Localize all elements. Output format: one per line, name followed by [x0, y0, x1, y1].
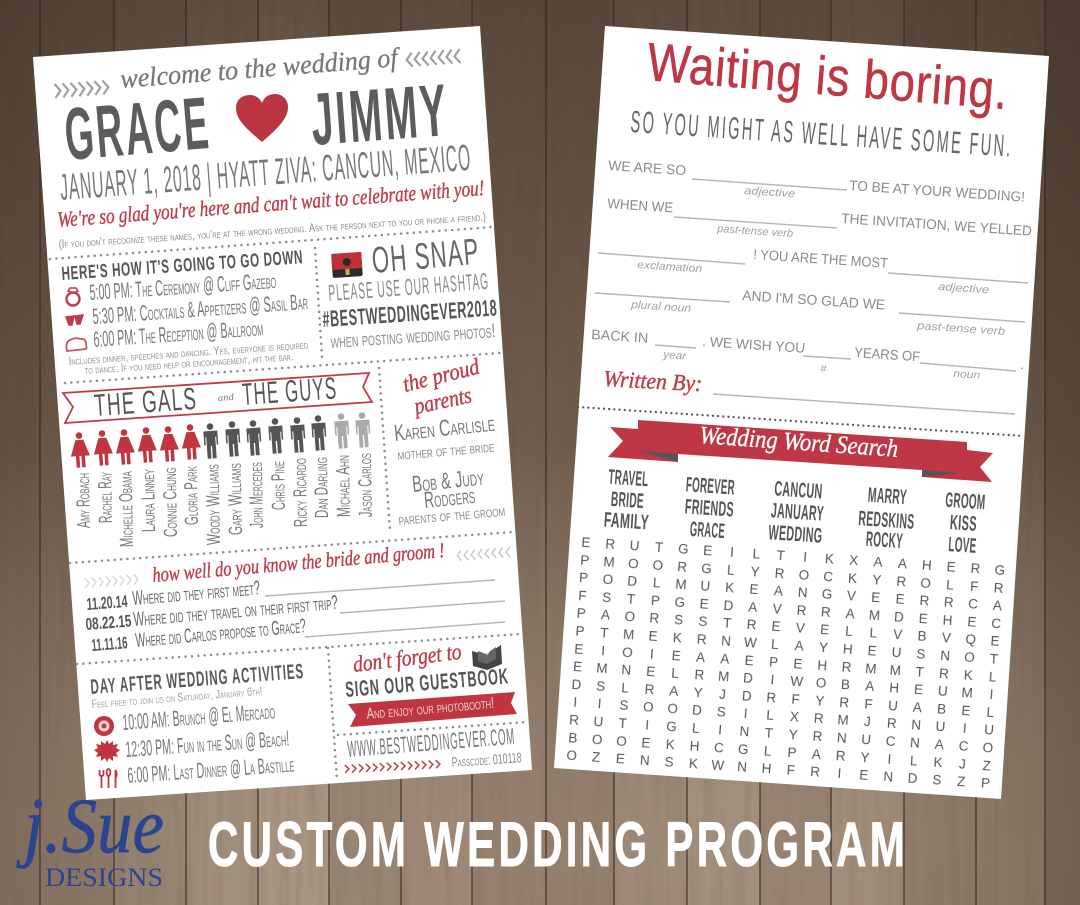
heading: how well: how well do you know the bride and groom ! — [151, 538, 445, 587]
text: photobooth: And enjoy our photobooth! — [366, 695, 495, 723]
panel: word list: FAMILY — [603, 509, 650, 534]
chart: word search grid — [566, 535, 1006, 791]
text: when posting: when posting wedding photos! — [330, 320, 496, 353]
text: party names: Gloria Park — [181, 466, 203, 525]
panel: day after activities: 6:00 PM: Last Dinner @ La Bastille — [127, 751, 295, 788]
text: party names: Laura Linney — [138, 469, 160, 532]
icon: sun — [94, 740, 120, 762]
chevrons: quiz right — [457, 547, 510, 561]
icon: glasses — [66, 315, 83, 325]
text: to be at your wedding: TO BE AT YOUR WEDDING! — [849, 177, 1025, 205]
panel: word list: WEDDING — [768, 521, 823, 548]
text: party names: Dan Darling — [311, 457, 333, 518]
panel: word list: JANUARY — [770, 499, 825, 526]
icon: cutlery — [100, 769, 117, 788]
heading: the gals: THE GALS — [93, 381, 198, 423]
text: when we: WHEN WE — [607, 195, 674, 215]
text: party names: Connie Chung — [160, 467, 182, 537]
heading: sign our guestbook: SIGN OUR GUESTBOOK — [344, 663, 510, 702]
hint: number: # — [820, 363, 828, 375]
chart: word search grid: BOOEKHCGLPARYILKJZ — [568, 730, 991, 773]
chart: word search grid: PTMEKRNWLAYHEUSNOT — [575, 624, 999, 667]
panel: day after activities — [90, 660, 305, 788]
text: second date: 08.22.15 — [85, 611, 132, 634]
icon: ring — [66, 288, 80, 306]
text: party names: Gary Williams — [225, 463, 247, 535]
heading: don't forget to: don't forget to — [352, 639, 463, 677]
text: you are the most: ! YOU ARE THE MOST — [753, 246, 889, 271]
banner: the gals and the guys — [63, 373, 372, 423]
text: the invitation: THE INVITATION, WE YELLED — [841, 210, 1032, 239]
banner: photobooth — [348, 692, 517, 727]
name: Grace: GRACE — [61, 81, 214, 176]
text: welcome message: We're so glad you're here and can't wait to celebrate with you! — [57, 175, 485, 232]
icon: instant camera — [331, 252, 363, 278]
text: full stop: . — [1020, 356, 1025, 372]
text: party names: Chris Pine — [268, 461, 290, 510]
panel: website — [345, 723, 522, 773]
chart: word search grid: EMNELRMDIWOBAHEUMI — [573, 659, 994, 702]
text: reception note: Includes dinner, speeches and dancing. Yes, everyone is required — [68, 337, 309, 368]
heading: the proud: the proud — [400, 354, 482, 397]
hint: adjective: adjective — [744, 185, 795, 200]
text: party names: Jason Carlos — [355, 453, 377, 517]
text: years of: YEARS OF — [854, 344, 921, 364]
panel: schedule: 5:00 PM: The Ceremony @ Cliff Gazebo — [89, 268, 277, 305]
panel: schedule: 6:00 PM: The Reception @ Ballroom — [93, 315, 264, 352]
text: hashtag: #BESTWEDDINGEVER2018 — [322, 294, 498, 332]
panel: word list: BRIDE — [610, 488, 645, 513]
text: written by: Written By: — [603, 366, 703, 396]
infographic: custom wedding program mockup: JANUARY 1, 2018 | HYATT ZIVA: CANCUN, MEXICO — [59, 137, 472, 208]
heading: schedule: HERE'S HOW IT'S GOING TO GO DOWN — [61, 247, 304, 285]
heading: parents: parents — [410, 382, 474, 419]
hint: past-tense verb: past-tense verb — [716, 223, 793, 240]
chart: word search grid: EIOIEAAEPEHRMMTRKL — [574, 641, 997, 685]
text: party names: Rachel Ray — [95, 472, 117, 523]
chart: word search grid: RUTIGLINTYRNUCNACO — [569, 712, 994, 756]
heading: waiting is boring: Waiting is boring. — [645, 32, 1011, 121]
text: mother name: Karen Carlisle — [393, 410, 496, 446]
panel: schedule — [61, 247, 309, 377]
heading: welcome: welcome to the wedding of — [119, 42, 402, 94]
panel: word list: FOREVER — [685, 473, 736, 500]
panel: quiz — [85, 538, 510, 655]
heading: oh snap: OH SNAP — [370, 231, 481, 281]
text: and i'm so glad we: AND I'M SO GLAD WE — [742, 287, 886, 312]
text: party names: Michelle Obama — [116, 471, 138, 547]
panel: word list: GRACE — [689, 518, 726, 543]
logo: j.Sue Designs: DESIGNS — [45, 863, 163, 892]
text: party names: Ricky Ricardo — [290, 458, 312, 527]
text: we are so: WE ARE SO — [608, 157, 687, 178]
chart: word search grid: DSLRAYJDRFYRFUABEL — [571, 677, 995, 720]
panel: word list — [603, 466, 986, 558]
chart: word search grid: FSTPGEDAVRRAMDEHEC — [578, 588, 1002, 631]
text: parents surname: Rodgers — [423, 482, 476, 513]
panel: word list: ROCKY — [865, 528, 904, 553]
text: passcode: Passcode: 010118 — [451, 749, 522, 770]
panel: word list: CANCUN — [774, 477, 823, 504]
panel: right games card: GROOM — [945, 489, 986, 514]
icon: guestbook — [472, 645, 502, 670]
banner: wedding word search — [608, 420, 993, 482]
text: party names: Michael Ahn — [333, 455, 355, 517]
panel: word list: MARRY — [867, 484, 908, 509]
text: and: and — [217, 392, 235, 404]
hint: noun: noun — [953, 368, 981, 382]
panel: word list: REDSKINS — [858, 507, 915, 534]
text: second question: Where did they travel on their first trip? — [133, 592, 339, 631]
panel: word list: FRIENDS — [684, 495, 735, 522]
icons: groomsmen — [203, 415, 327, 459]
hint: plural noun: plural noun — [630, 299, 691, 315]
panel: word list: LOVE — [948, 533, 977, 558]
text: first date: 11.20.14 — [86, 592, 129, 614]
chart: word search grid: PAORSSTREVELLVBVQE — [576, 606, 1000, 649]
panel: guestbook — [344, 639, 517, 727]
panel: mad libs — [591, 157, 1032, 414]
hint: adjective two: adjective — [938, 281, 989, 296]
panel: left program card — [33, 26, 532, 800]
chart: word search grid: IISOODSILXRMJRNUIU — [573, 695, 995, 738]
chart: word search grid: ERUTGEILTIKXAAHERG — [581, 535, 1006, 578]
text: invite line: Feel free to join us on Saturday, January 6th! — [91, 684, 263, 711]
panel: word list: KISS — [949, 511, 978, 536]
text: mother role: mother of the bride — [397, 439, 495, 464]
chevrons: website — [345, 760, 440, 773]
text: party names — [73, 453, 377, 547]
panel: day after activities: 10:00 AM: Brunch @ El Mercado — [121, 698, 276, 735]
chevrons: quiz left — [85, 574, 138, 588]
text: back in: BACK IN — [591, 326, 649, 346]
hint: exclamation: exclamation — [637, 259, 702, 275]
heading: day after: DAY AFTER WEDDING ACTIVITIES — [90, 660, 305, 699]
text: cocktail time: 5:30 PM: Cocktails & Appetizers @ Sasil Bar — [92, 289, 309, 329]
text: parents names: Bob & Judy — [411, 464, 485, 497]
panel: hashtag — [322, 231, 498, 353]
icons: ushers — [334, 412, 371, 449]
icon: reception table — [66, 338, 86, 351]
text: party names: Woody Williams — [203, 464, 225, 545]
icon: heart — [236, 94, 288, 142]
text: parents role: parents of the groom — [398, 503, 506, 529]
chart: word search grid: PODLMUKEANGVEERRCA — [579, 570, 1002, 614]
text: party names: Amy Robach — [73, 473, 95, 528]
logo: j.Sue Designs — [16, 782, 164, 892]
text: note about names: (If you don't recognize these names, you're at the wrong wedding. Ask the person next to you or phone a friend.) — [58, 209, 486, 251]
text: we wish you: . WE WISH YOU — [702, 333, 806, 356]
panel: proud parents — [393, 354, 506, 529]
icons: bridesmaids — [69, 424, 202, 468]
panel: day after activities: 12:30 PM: Fun in the Sun @ Beach! — [125, 726, 290, 762]
chart: word search grid: OZENSKWNHFRIENDSZP — [566, 748, 991, 791]
text: third date: 11.11.16 — [91, 633, 128, 655]
text: reception note line two: to dance. If you need help or encouragement, hit the bar. — [84, 349, 294, 377]
hint: year: year — [662, 349, 688, 363]
chevrons: header right — [406, 49, 461, 67]
icon: brunch — [94, 716, 114, 736]
panel: word list: TRAVEL — [608, 466, 649, 491]
chevrons: header left — [54, 80, 109, 98]
logo: j.Sue Designs: j.Sue — [16, 782, 164, 869]
text: party names: John Mercedes — [246, 462, 268, 528]
chart: word search grid: PMOORGLYROCKYROLFR — [580, 552, 1004, 596]
text: third question: Where did Carlos propose to Grace? — [135, 615, 307, 652]
text: word search title: Wedding Word Search — [699, 422, 899, 463]
text: first question: Where did they first meet? — [132, 577, 261, 610]
hint: past-tense verb two: past-tense verb — [916, 320, 1005, 338]
panel: wedding party — [63, 370, 377, 547]
name: Jimmy: JIMMY — [308, 68, 452, 161]
panel: right games card — [554, 26, 1049, 799]
infographic: custom wedding program mockup: WWW.BESTWEDDINGEVER.COM — [346, 723, 516, 762]
panel: left program card: PLEASE USE OUR HASHTAG — [327, 268, 490, 306]
heading: the guys: THE GUYS — [241, 370, 338, 412]
